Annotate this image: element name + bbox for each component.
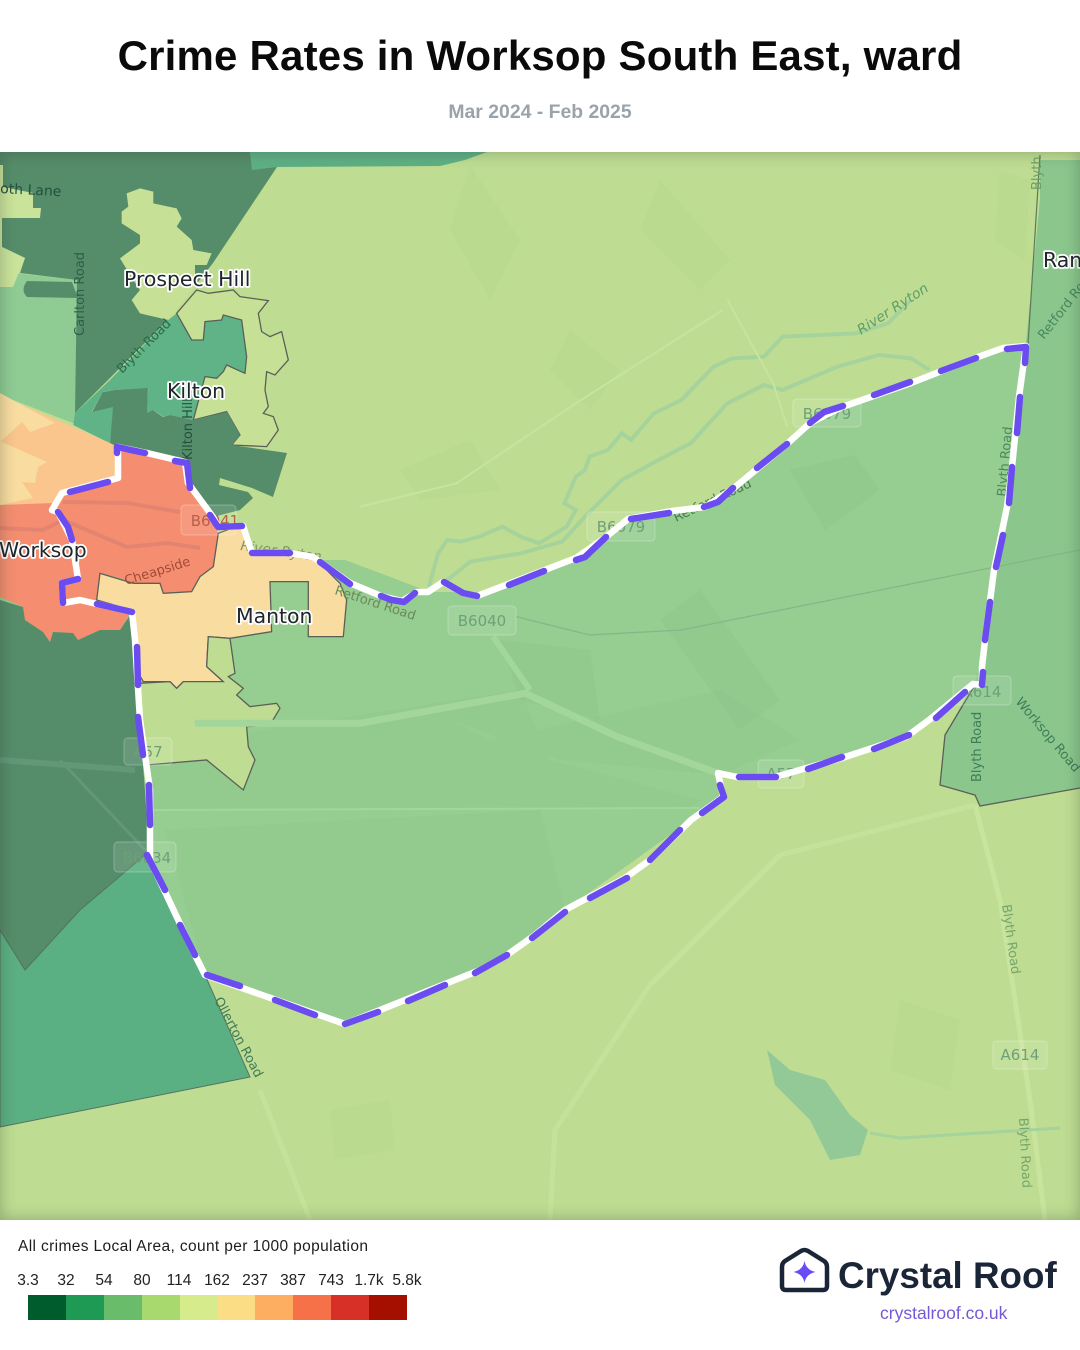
legend value labels: 387	[280, 1272, 306, 1289]
legend value labels: 237	[242, 1272, 268, 1289]
road and river labels: oth Lane	[0, 181, 62, 200]
faint field patches north and south	[240, 165, 1030, 1160]
legend	[17, 1238, 422, 1320]
roads and rivers	[0, 300, 1080, 1220]
region: left medium green block	[0, 273, 78, 425]
title: Crime Rates in Worksop South East, ward	[118, 32, 962, 79]
road number shields: A614	[963, 683, 1001, 701]
region: Worksop orange red	[0, 447, 218, 642]
road number shields: A57	[766, 765, 796, 783]
legend value labels: 54	[95, 1272, 113, 1289]
road and river labels: Blyth	[1030, 156, 1045, 190]
place labels: Prospect Hill	[124, 267, 250, 291]
place labels: Kilton	[167, 379, 225, 403]
region: Kilton dark	[92, 388, 287, 517]
road and river labels: Blyth Road	[998, 903, 1023, 975]
region: Worksop dark green south	[0, 600, 150, 970]
place labels: Worksop	[0, 538, 87, 562]
road number shields: B6041	[191, 512, 239, 530]
region: dark strip off Carlton Road	[24, 281, 78, 298]
road and river labels	[0, 156, 1080, 1188]
region: Kilton pale	[177, 290, 288, 447]
road and river labels: River Ryton	[239, 538, 323, 565]
legend value labels: 743	[318, 1272, 344, 1289]
road and river labels: Blyth Road	[114, 316, 175, 377]
lake	[767, 1050, 868, 1160]
road and river labels: Blyth Road	[1015, 1117, 1034, 1188]
road and river labels: Retford Road	[333, 584, 417, 624]
road number shields: B6079	[803, 405, 851, 423]
region: east and ward medium green	[0, 155, 1080, 1025]
legend value labels: 1.7k	[354, 1272, 384, 1289]
road and river labels: Retford Road	[671, 476, 754, 526]
legend value labels	[17, 1272, 422, 1289]
ward boundary: purple dashes	[58, 347, 1026, 1024]
region: pale green north west patches	[0, 165, 41, 287]
legend value labels: 32	[57, 1272, 75, 1289]
road and river labels: River Ryton	[854, 280, 932, 338]
road number shields: A614	[1001, 1046, 1039, 1064]
road number shields: B6040	[458, 612, 506, 630]
region: Worksop peach	[0, 395, 118, 510]
place labels	[0, 248, 1080, 628]
road and river labels: Ollerton Road	[210, 995, 265, 1080]
legend value labels: 162	[204, 1272, 230, 1289]
region: dark green north west	[0, 152, 277, 413]
place labels: Manton	[236, 604, 312, 628]
legend value labels: 114	[167, 1272, 191, 1289]
red area roads	[0, 502, 200, 548]
road and river labels: Cheapside	[123, 555, 192, 589]
region: top teal band	[250, 152, 487, 178]
road and river labels: Carlton Road	[73, 252, 88, 336]
road number shields: B6034	[123, 849, 171, 867]
map edge shadow	[0, 152, 1080, 1220]
region: Kilton teal	[73, 313, 247, 443]
road number shields: B6079	[597, 518, 645, 536]
region: Prospect Hill	[120, 188, 212, 320]
legend colour scale	[28, 1295, 407, 1320]
region: Worksop pale yellow	[0, 393, 55, 505]
website link: crystalroof.co.uk	[880, 1303, 1007, 1323]
subtitle: date range: Mar 2024 - Feb 2025	[448, 101, 632, 123]
logo: Crystal Roof	[780, 1248, 1057, 1323]
road and river labels: Kilton Hill	[181, 398, 196, 460]
icon: house with star	[780, 1248, 830, 1292]
road and river labels: Blyth Road	[995, 426, 1016, 497]
legend title: All crimes Local Area, count per 1000 population	[18, 1238, 368, 1255]
road and river labels: Blyth Road	[970, 712, 985, 782]
region: south of Manton pale green	[138, 637, 280, 790]
legend value labels: 5.8k	[392, 1272, 422, 1289]
legend value labels: 3.3	[17, 1272, 39, 1289]
legend value labels: 80	[133, 1272, 151, 1289]
region: teal south west	[0, 855, 250, 1127]
wordmark: Crystal Roof	[838, 1255, 1057, 1296]
road number shields	[114, 399, 1047, 1069]
road number shields: A57	[133, 743, 163, 761]
ward boundary: white line	[52, 346, 1026, 1024]
region: Manton yellow	[97, 525, 347, 688]
map	[0, 152, 1080, 1220]
